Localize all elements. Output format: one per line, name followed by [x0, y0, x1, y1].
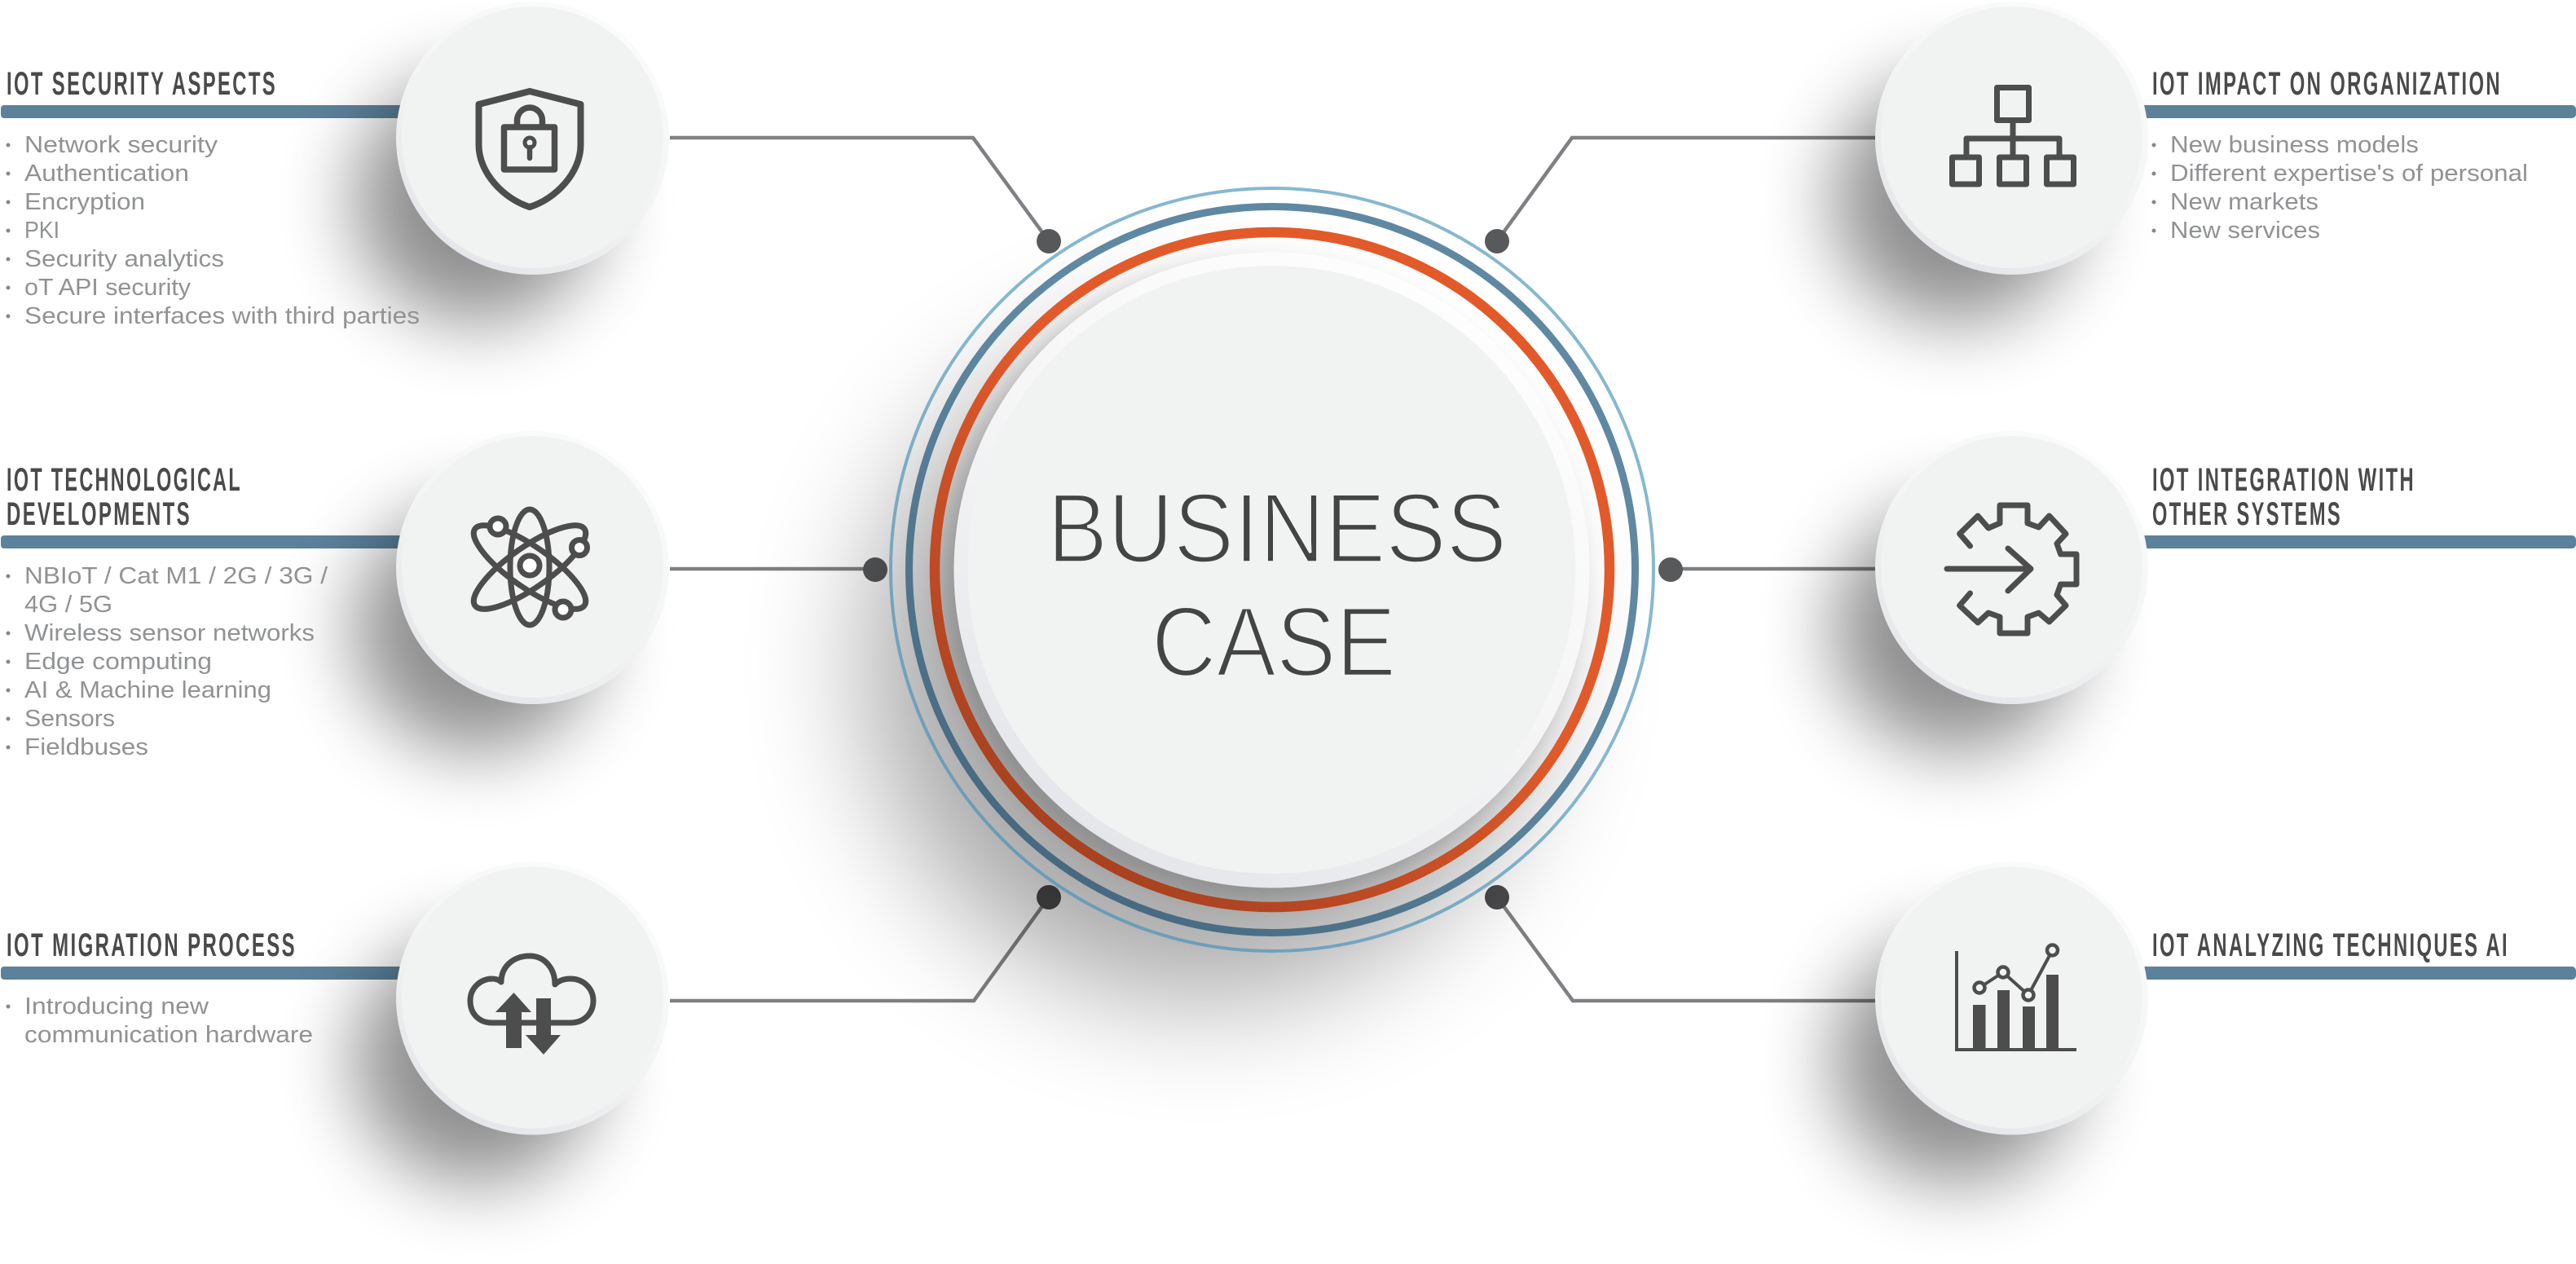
node disc [396, 862, 669, 1134]
bullet list: Security analytics [24, 246, 224, 272]
heading bar [1, 535, 425, 548]
heading: IOT MIGRATION PROCESS [7, 927, 297, 963]
heading: IOT TECHNOLOGICAL [7, 462, 242, 498]
connector: middle right [1658, 557, 1875, 582]
panel: IoT analyzing techniques AI [1834, 862, 2576, 1183]
node disc [1875, 862, 2148, 1134]
bullet list: New services [2170, 218, 2320, 244]
bullet list [7, 563, 328, 760]
heading: IOT SECURITY ASPECTS [7, 66, 277, 102]
connector: middle left [670, 557, 887, 582]
bullet list: NBIoT / Cat M1 / 2G / 3G / [24, 563, 328, 589]
blue ring [909, 207, 1635, 932]
connector: bottom right [1485, 885, 1875, 1001]
panel: IoT impact on organization [1834, 2, 2576, 322]
bullet list: Secure interfaces with third parties [24, 303, 420, 329]
bullet list [2151, 132, 2528, 244]
bullet list [7, 993, 313, 1048]
bullet list: 4G / 5G [24, 592, 112, 618]
orange ring [935, 232, 1609, 907]
panel: IoT migration process [1, 862, 669, 1183]
bullet list: Edge computing [24, 649, 212, 675]
heading bar [1, 967, 425, 980]
bullet list [7, 132, 420, 329]
central business case badge [868, 188, 1653, 998]
title: business case: BUSINESS [1047, 473, 1507, 584]
bullet list: Encryption [24, 189, 145, 215]
heading: OTHER SYSTEMS [2152, 496, 2342, 532]
outer thin ring [891, 188, 1653, 951]
bullet list: New business models [2170, 132, 2419, 158]
heading: DEVELOPMENTS [7, 496, 192, 532]
heading bar [2119, 967, 2576, 980]
bullet list: Network security [24, 132, 218, 158]
bullet list: communication hardware [24, 1022, 313, 1048]
bullet list: Fieldbuses [24, 734, 148, 760]
connector: bottom left [670, 885, 1061, 1001]
disc face [968, 266, 1576, 874]
bullet list: AI & Machine learning [24, 677, 271, 703]
bullet list: Introducing new [24, 993, 209, 1020]
connector: top right [1485, 138, 1875, 253]
bullet list: Authentication [24, 161, 189, 187]
icon: organization chart [1953, 88, 2073, 184]
heading bar [1, 105, 425, 118]
node disc [396, 2, 669, 275]
heading bar [2119, 535, 2576, 548]
panel: IoT technological developments [1, 431, 669, 760]
bullet list: PKI [24, 218, 59, 244]
node disc [396, 431, 669, 704]
connector: top left [670, 138, 1061, 253]
node disc [1875, 431, 2148, 704]
bullet list: oT API security [24, 275, 192, 301]
bullet list: Wireless sensor networks [24, 620, 315, 646]
bullet list: Sensors [24, 706, 115, 732]
node disc [1875, 2, 2148, 275]
icon: shield with padlock [479, 91, 580, 207]
icon: atom [463, 509, 597, 625]
bullet list: New markets [2170, 189, 2318, 215]
bullet list: Different expertise's of personal [2170, 161, 2528, 187]
panel: IoT security aspects [1, 2, 669, 329]
panel: IoT integration with other systems [1834, 431, 2576, 751]
icon: bar and line chart [1957, 945, 2076, 1050]
disc bevel [953, 253, 1589, 888]
icon: gear with arrow [1947, 505, 2076, 633]
heading bar [2119, 105, 2576, 118]
icon: cloud with up and down arrows [470, 956, 593, 1055]
title: business case: CASE [1151, 587, 1396, 698]
